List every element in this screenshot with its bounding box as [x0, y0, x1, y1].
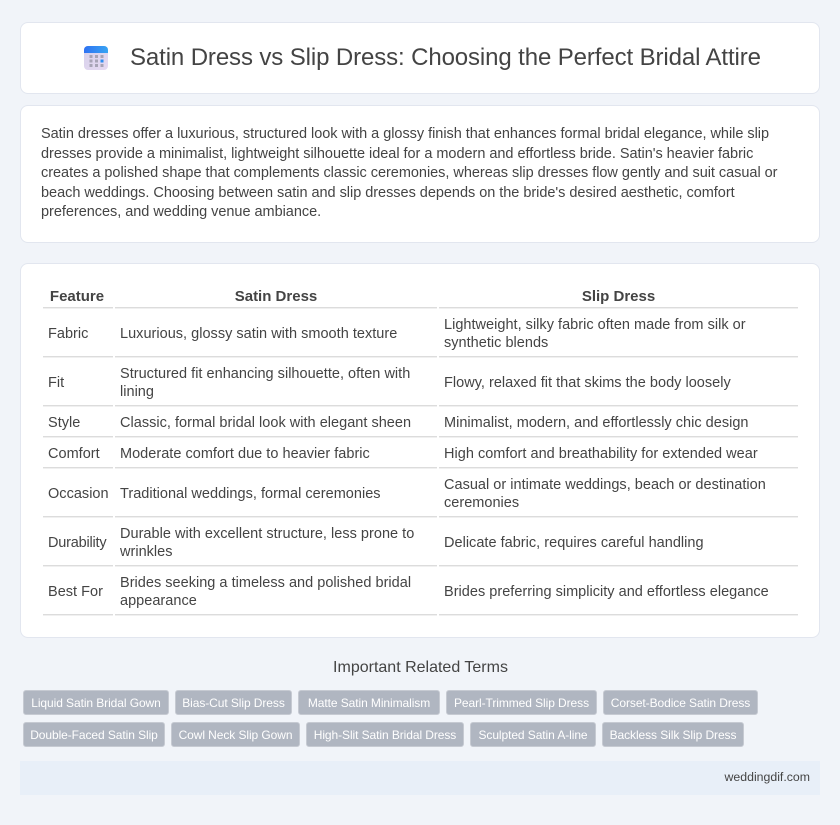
- table rows: appearance: [120, 593, 197, 609]
- table panel: [20, 263, 820, 638]
- column headers: [50, 288, 655, 305]
- table rows: Casual or intimate weddings, beach or destination: [444, 477, 766, 493]
- table rows: Fit: [48, 375, 64, 391]
- footer bar: [20, 761, 820, 795]
- related terms tags: Corset-Bodice Satin Dress: [611, 696, 750, 710]
- related terms tags: Matte Satin Minimalism: [308, 696, 430, 710]
- intro text: Satin dresses offer a luxurious, structured look with a glossy finish that enhances formal bridal elegance, while slip: [41, 126, 769, 142]
- table rows: Moderate comfort due to heavier fabric: [120, 446, 370, 462]
- related terms tags: Sculpted Satin A-line: [478, 728, 588, 742]
- table rows: Brides seeking a timeless and polished bridal: [120, 575, 411, 591]
- table rows: Luxurious, glossy satin with smooth texture: [120, 326, 397, 342]
- related terms tags: Bias-Cut Slip Dress: [182, 696, 285, 710]
- title: Satin Dress vs Slip Dress: Choosing the Perfect Bridal Attire: [130, 44, 761, 71]
- table rows: Comfort: [48, 446, 100, 462]
- related terms heading: Important Related Terms: [333, 659, 508, 676]
- intro text: preferences, and wedding venue ambiance.: [41, 204, 321, 220]
- related terms tags: Liquid Satin Bridal Gown: [31, 696, 161, 710]
- table rows: Structured fit enhancing silhouette, often with: [120, 366, 410, 382]
- column headers: Feature: [50, 288, 104, 305]
- column headers: Slip Dress: [582, 288, 655, 305]
- table rows: Delicate fabric, requires careful handling: [444, 535, 704, 551]
- related terms tags: Cowl Neck Slip Gown: [179, 728, 292, 742]
- intro text: creates a polished shape that complements classic ceremonies, whereas slip dresses flow gently and suit casual or: [41, 165, 777, 181]
- table rows: wrinkles: [120, 544, 173, 560]
- intro text: dresses provide a minimalist, lightweight silhouette ideal for a modern and effortless bride. Satin's heavier fabric: [41, 146, 753, 162]
- table rows: Brides preferring simplicity and effortless elegance: [444, 584, 769, 600]
- icon: calendar: [84, 46, 108, 70]
- intro text: [41, 126, 778, 220]
- table rows: synthetic blends: [444, 335, 548, 351]
- table rows: Fabric: [48, 326, 88, 342]
- related terms tags: Double-Faced Satin Slip: [30, 728, 158, 742]
- footer source: weddingdif.com: [725, 770, 810, 784]
- table rows: Traditional weddings, formal ceremonies: [120, 486, 381, 502]
- table rows: Minimalist, modern, and effortlessly chic design: [444, 415, 749, 431]
- header panel: [20, 22, 820, 94]
- table rows: Durability: [48, 535, 106, 551]
- intro text: beach weddings. Choosing between satin and slip dresses depends on the bride's desired aesthetic, comfort: [41, 184, 735, 200]
- table rows: Classic, formal bridal look with elegant sheen: [120, 415, 411, 431]
- table rows: High comfort and breathability for extended wear: [444, 446, 758, 462]
- table rows: Lightweight, silky fabric often made from silk or: [444, 317, 746, 333]
- table rows: Occasion: [48, 486, 109, 502]
- table rows: Style: [48, 415, 80, 431]
- related terms tags: High-Slit Satin Bridal Dress: [314, 728, 456, 742]
- table rows: [43, 307, 798, 616]
- table rows: Durable with excellent structure, less prone to: [120, 526, 414, 542]
- table rows: Best For: [48, 584, 103, 600]
- table rows: Flowy, relaxed fit that skims the body loosely: [444, 375, 731, 391]
- related terms tags: Pearl-Trimmed Slip Dress: [454, 696, 589, 710]
- table rows: ceremonies: [444, 495, 519, 511]
- column headers: Satin Dress: [235, 288, 317, 305]
- table rows: lining: [120, 384, 154, 400]
- intro panel: [20, 105, 820, 243]
- related terms tags: Backless Silk Slip Dress: [610, 728, 736, 742]
- related terms tags: [23, 690, 758, 747]
